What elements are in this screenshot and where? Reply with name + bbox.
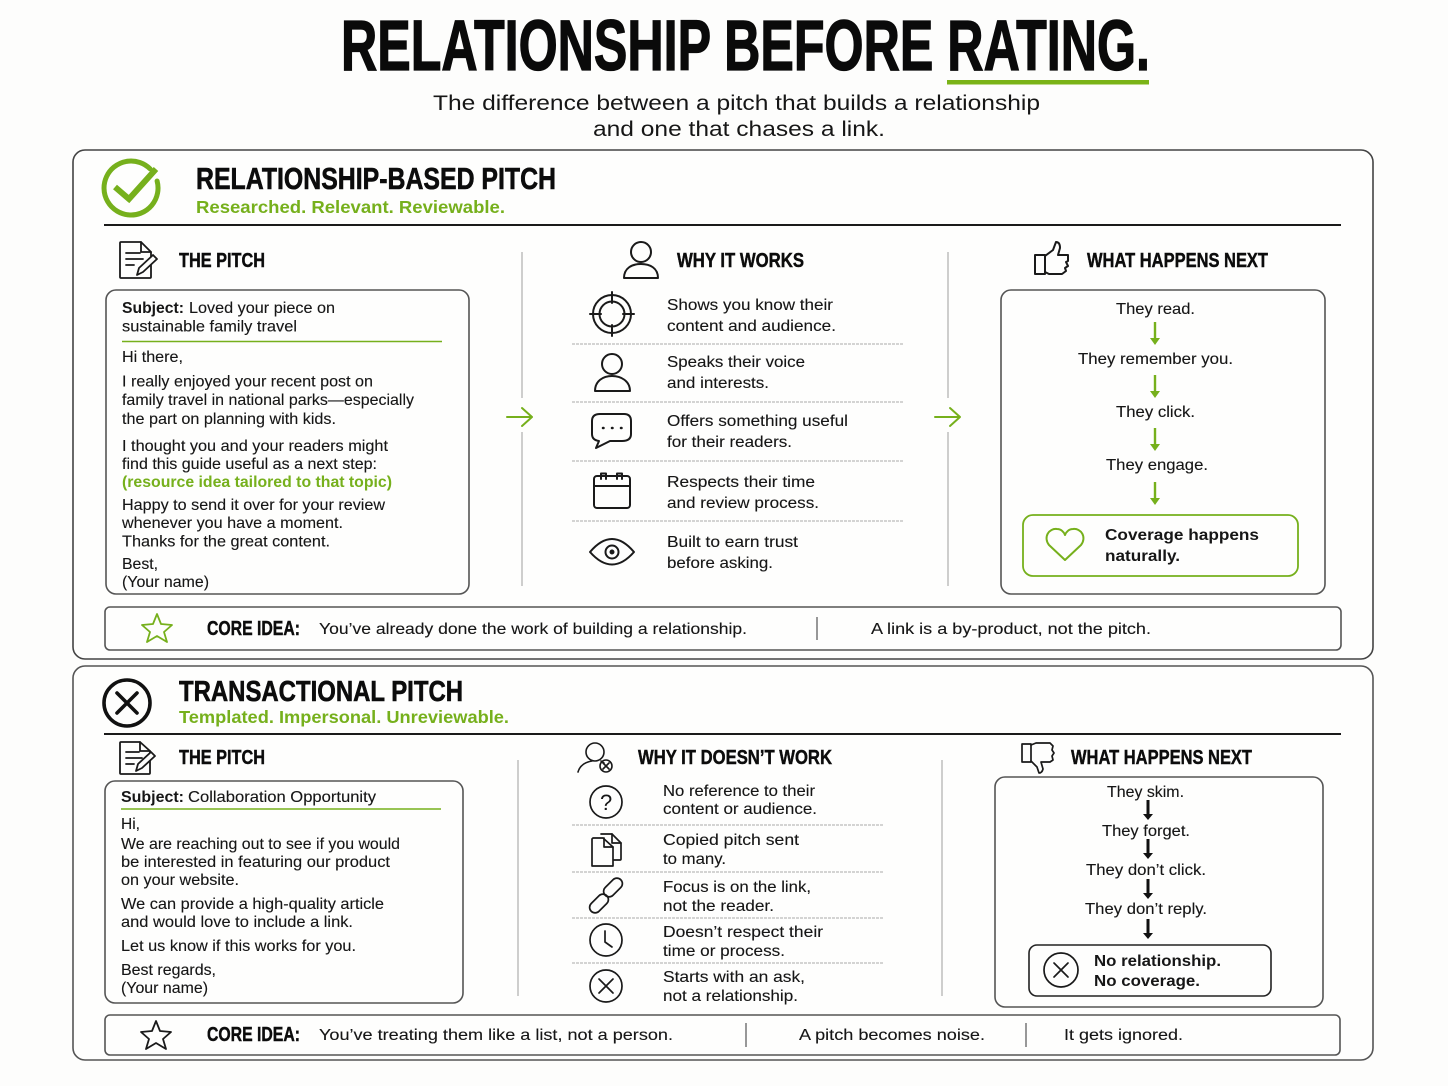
- core idea bar: transactional pitch: You’ve treating them like a list, not a person.: [319, 1027, 673, 1044]
- email card: good pitch: find this guide useful as a next step:: [122, 456, 377, 473]
- row: respects time: Respects their time: [667, 474, 815, 491]
- flow card: bad outcomes: They skim.: [1107, 784, 1184, 801]
- heading: relationship-based pitch: Researched. Relevant. Reviewable.: [196, 197, 505, 217]
- row: copied pitch: Copied pitch sent: [663, 832, 800, 849]
- arrow: down: [1150, 482, 1160, 505]
- row: copied pitch: [592, 832, 800, 868]
- outcome: no relationship: No coverage.: [1094, 973, 1200, 990]
- email card: bad pitch: be interested in featuring our product: [121, 854, 391, 871]
- row: starts with an ask: not a relationship.: [663, 988, 798, 1005]
- outcome: no relationship: No relationship.: [1094, 953, 1221, 970]
- outcome: coverage happens naturally: [1023, 515, 1298, 576]
- arrow: pitch to why it works: [507, 408, 532, 426]
- row: no reference: content or audience.: [663, 801, 817, 818]
- flow card: bad outcomes: [995, 777, 1323, 1007]
- email card: good pitch: I thought you and your readers might: [122, 438, 389, 455]
- email card: bad pitch: Hi,: [121, 816, 140, 833]
- row: earns trust: before asking.: [667, 555, 773, 572]
- icon: thumbs down: [1022, 743, 1054, 773]
- row: earns trust: [590, 534, 799, 572]
- row: link focus: [587, 876, 811, 915]
- heading: why it doesn't work: WHY IT DOESN’T WORK: [638, 746, 832, 769]
- row: starts with an ask: [590, 969, 805, 1005]
- email card: bad pitch: Best regards,: [121, 962, 216, 979]
- heading: why it works: WHY IT WORKS: [677, 249, 804, 272]
- flow card: good outcomes: [1001, 290, 1325, 594]
- email card: good pitch: sustainable family travel: [122, 318, 297, 336]
- email card: bad pitch: [105, 781, 463, 1003]
- core idea bar: transactional pitch: CORE IDEA:: [207, 1023, 300, 1046]
- icon: document with pencil: [120, 242, 157, 278]
- icon: black x circle: [104, 680, 150, 726]
- row: knows content: Shows you know their: [667, 297, 834, 314]
- row: copied pitch: to many.: [663, 851, 726, 868]
- core idea bar: relationship pitch: [105, 607, 1341, 650]
- row: useful: for their readers.: [667, 434, 792, 451]
- flow card: good outcomes: They read.: [1116, 301, 1195, 318]
- arrow: down: [1143, 839, 1153, 859]
- row: voice: [595, 354, 805, 392]
- row: knows content: [590, 292, 836, 336]
- core idea bar: transactional pitch: A pitch becomes noise.: [799, 1027, 985, 1044]
- row: no respect: Doesn’t respect their: [663, 924, 824, 941]
- outcome: coverage happens naturally: naturally.: [1105, 548, 1180, 565]
- core idea bar: transactional pitch: [105, 1015, 1340, 1055]
- email card: good pitch: (resource idea tailored to that topic): [122, 474, 392, 491]
- row: link focus: not the reader.: [663, 898, 774, 915]
- row: earns trust: Built to earn trust: [667, 534, 799, 551]
- email card: good pitch: I really enjoyed your recent post on: [122, 374, 373, 390]
- list: why it doesn't work: [572, 783, 883, 1005]
- heading: what happens next: WHAT HAPPENS NEXT: [1087, 249, 1268, 272]
- email card: bad pitch: Subject:: [121, 789, 184, 806]
- row: no respect: [590, 924, 824, 960]
- arrow: down: [1143, 919, 1153, 939]
- icon: green check circle: [104, 161, 158, 215]
- flow card: bad outcomes: They don’t click.: [1086, 862, 1206, 879]
- email card: bad pitch: We are reaching out to see if you would: [121, 836, 400, 853]
- row: no respect: time or process.: [663, 943, 785, 960]
- outcome: no relationship: [1029, 945, 1271, 996]
- email card: good pitch: (Your name): [122, 574, 209, 591]
- email card: bad pitch: Let us know if this works for you.: [121, 938, 356, 955]
- panel: relationship-based pitch: [73, 150, 1373, 659]
- arrow: down: [1150, 322, 1160, 345]
- icon: person: [624, 242, 658, 278]
- heading: the pitch: THE PITCH: [179, 746, 265, 769]
- email card: bad pitch: on your website.: [121, 872, 239, 889]
- core idea bar: relationship pitch: A link is a by-product, not the pitch.: [871, 621, 1151, 638]
- flow card: good outcomes: They remember you.: [1078, 351, 1233, 368]
- flow card: bad outcomes: They forget.: [1102, 823, 1190, 840]
- email card: good pitch: the part on planning with kids.: [122, 411, 336, 428]
- flow card: good outcomes: They click.: [1116, 404, 1195, 421]
- heading: transactional pitch: Templated. Impersonal. Unreviewable.: [179, 707, 509, 727]
- panel: transactional pitch: [73, 666, 1373, 1060]
- email card: bad pitch: We can provide a high-quality article: [121, 896, 384, 913]
- row: respects time: [594, 474, 819, 512]
- heading: relationship-based pitch: [196, 162, 556, 217]
- subtitle: The difference between a pitch that builds a relationship: [433, 91, 1040, 115]
- email card: good pitch: Hi there,: [122, 349, 183, 366]
- email card: good pitch: Subject:: [122, 300, 184, 317]
- email card: bad pitch: Collaboration Opportunity: [188, 789, 376, 806]
- row: useful: Offers something useful: [667, 413, 848, 430]
- row: voice: Speaks their voice: [667, 354, 805, 371]
- icon: person with x: [578, 743, 612, 772]
- row: respects time: and review process.: [667, 495, 819, 512]
- row: no reference: ?: [600, 790, 612, 815]
- email card: good pitch: whenever you have a moment.: [121, 515, 343, 532]
- arrow: down: [1143, 879, 1153, 899]
- list: why it works: [572, 292, 903, 572]
- row: useful: [592, 413, 848, 451]
- row: voice: and interests.: [667, 375, 769, 392]
- heading: transactional pitch: [179, 676, 509, 727]
- arrow: down: [1150, 375, 1160, 398]
- email card: good pitch: Happy to send it over for your review: [122, 497, 385, 514]
- flow card: bad outcomes: They don’t reply.: [1085, 901, 1207, 918]
- email card: good pitch: family travel in national parks—especially: [122, 392, 414, 409]
- email card: good pitch: [106, 290, 469, 594]
- flow card: good outcomes: They engage.: [1106, 457, 1208, 474]
- arrow: why it works to what happens next: [935, 408, 960, 426]
- email card: good pitch: Thanks for the great content.: [122, 534, 330, 550]
- core idea bar: relationship pitch: CORE IDEA:: [207, 617, 300, 640]
- row: knows content: content and audience.: [667, 318, 836, 335]
- arrow: down: [1143, 800, 1153, 820]
- row: no reference: No reference to their: [663, 783, 816, 800]
- row: link focus: Focus is on the link,: [663, 879, 811, 896]
- email card: bad pitch: (Your name): [121, 980, 208, 997]
- subtitle: [433, 91, 1040, 141]
- email card: good pitch: Best,: [122, 556, 158, 573]
- heading: transactional pitch: TRANSACTIONAL PITCH: [179, 676, 463, 708]
- row: no reference: [590, 783, 817, 818]
- icon: document with pencil: [120, 742, 155, 774]
- email card: good pitch: Loved your piece on: [189, 300, 335, 317]
- core idea bar: transactional pitch: It gets ignored.: [1064, 1027, 1183, 1044]
- outcome: coverage happens naturally: Coverage happens: [1105, 527, 1259, 544]
- subtitle: and one that chases a link.: [593, 117, 885, 141]
- heading: what happens next: WHAT HAPPENS NEXT: [1071, 746, 1252, 769]
- row: starts with an ask: Starts with an ask,: [663, 969, 805, 986]
- heading: relationship-based pitch: RELATIONSHIP-BASED PITCH: [196, 162, 556, 196]
- arrow: down: [1150, 428, 1160, 451]
- heading: the pitch: THE PITCH: [179, 249, 265, 272]
- icon: thumbs up: [1035, 242, 1068, 274]
- core idea bar: relationship pitch: You’ve already done the work of building a relationship.: [319, 621, 747, 638]
- email card: bad pitch: and would love to include a link.: [121, 914, 353, 931]
